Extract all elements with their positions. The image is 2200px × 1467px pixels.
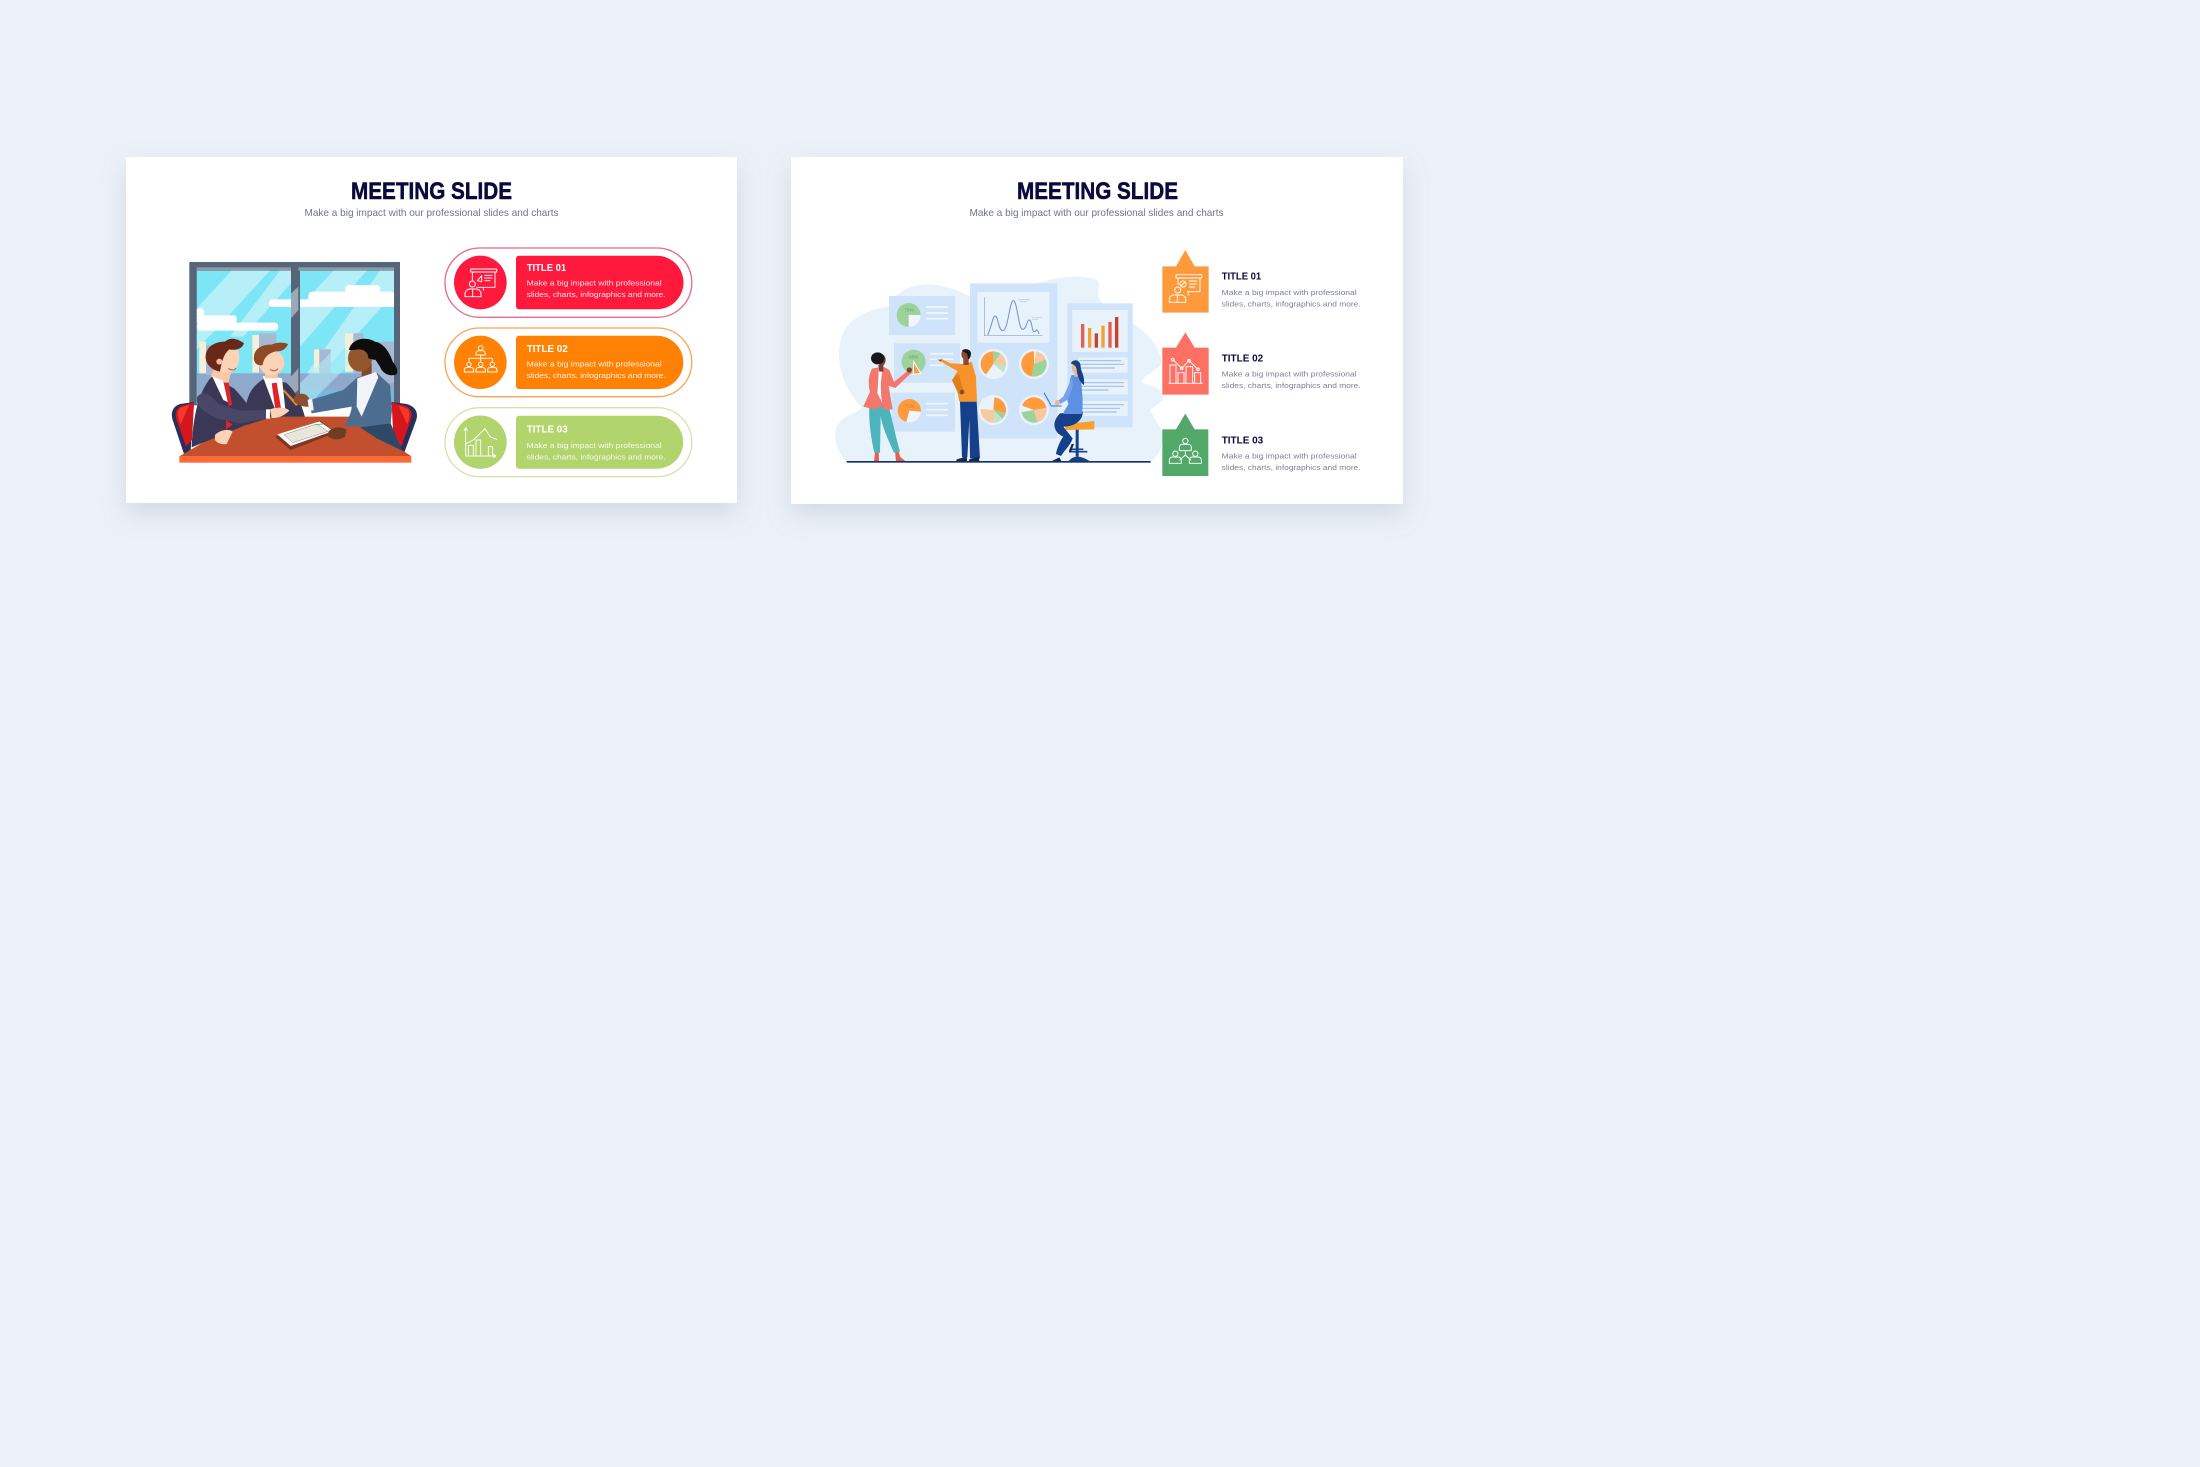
pie chart: b [1019,349,1049,379]
text: description: slides, charts, infographics and more. [527,371,666,380]
text: title 03: TITLE 03 [527,424,568,436]
chair: left [172,402,194,454]
illustration: team presenting charts on boards [835,277,1163,463]
icon: organisation chart on orange circle [454,336,507,389]
pie chart: d [1019,395,1049,425]
icon tag: connected team on green arrow box [1162,414,1208,476]
chart panel: lower left: 72% [905,403,914,408]
icon tag: bars and trend on coral arrow box [1162,332,1209,395]
subtitle: slide 2: Make a big impact with our professional slides and charts [970,207,1224,219]
background blob [835,277,1163,462]
chart panel: middle left [894,343,960,383]
bar: green text block [516,416,683,469]
icon: growth chart on green circle [454,415,507,469]
text: description [1222,288,1361,309]
clipboard with papers [275,421,336,450]
text: description: Make a big impact with professional [1222,451,1357,460]
bar: orange text block [516,336,683,389]
text: description [527,278,666,299]
option: green tag [1162,414,1361,476]
text: description [1222,451,1361,472]
subtitle: slide 1: Make a big impact with our professional slides and charts [304,207,558,219]
text: title 02: TITLE 02 [1222,353,1263,365]
text: description: Make a big impact with professional [527,278,662,288]
text: description: slides, charts, infographics and more. [527,290,666,299]
panel: slide 1 [126,157,737,503]
board: right with bar chart and text lines [1067,303,1133,427]
text: description: Make a big impact with professional [1222,370,1357,379]
text: description: Make a big impact with professional [1222,288,1357,297]
chart panel: upper left: 75% [904,307,914,312]
text: title 01: TITLE 01 [1222,271,1261,283]
chart panel: upper left [889,296,955,335]
bar chart [1081,317,1118,348]
option: coral tag [1162,332,1361,395]
text: description: slides, charts, infographics and more. [1222,300,1361,309]
person: man in the middle [245,343,306,420]
text: description [527,441,666,462]
text: description [1222,370,1361,390]
illustration: three colleagues at a meeting table by a window [172,262,417,463]
person: seated woman with laptop [1044,360,1094,462]
pie chart: a [978,349,1008,379]
text: description: slides, charts, infographics and more. [527,452,666,462]
option: pill 2 orange [445,328,692,397]
chart panel: lower left [892,393,955,432]
ground line [847,461,1151,463]
text: description [527,360,666,380]
bar: red text block [516,256,684,309]
text: title 03: TITLE 03 [1222,434,1263,446]
person: man on the left [192,339,289,447]
title: slide 1 heading: MEETING SLIDE [351,178,512,205]
title: slide 2 heading: MEETING SLIDE [1017,178,1178,205]
hand holding clipboard [328,427,347,439]
table [179,417,411,463]
pie chart: c [978,395,1008,425]
person: woman pointing at chart [863,352,912,462]
text: description: Make a big impact with professional [527,441,662,450]
text: title 01: TITLE 01 [527,262,566,274]
text: description: slides, charts, infographics and more. [1222,381,1361,390]
icon: presenter with board on red circle [454,256,507,309]
person: man in orange sweater [937,349,980,462]
option: orange tag [1162,250,1361,313]
option: pill 3 green [445,408,692,477]
person: woman in blue jacket [283,339,402,451]
board: central with line chart and pies [970,283,1057,438]
text: description: slides, charts, infographics and more. [1222,463,1361,472]
option: pill 1 red [445,248,692,317]
chair: right [392,402,417,453]
icon tag: presentation board on orange arrow box [1162,250,1209,313]
text: description: Make a big impact with professional [527,360,662,368]
chart panel: middle left: 95% [909,354,918,359]
line chart [984,297,1042,336]
panel: slide 2 [791,157,1403,504]
text: title 02: TITLE 02 [527,343,568,355]
